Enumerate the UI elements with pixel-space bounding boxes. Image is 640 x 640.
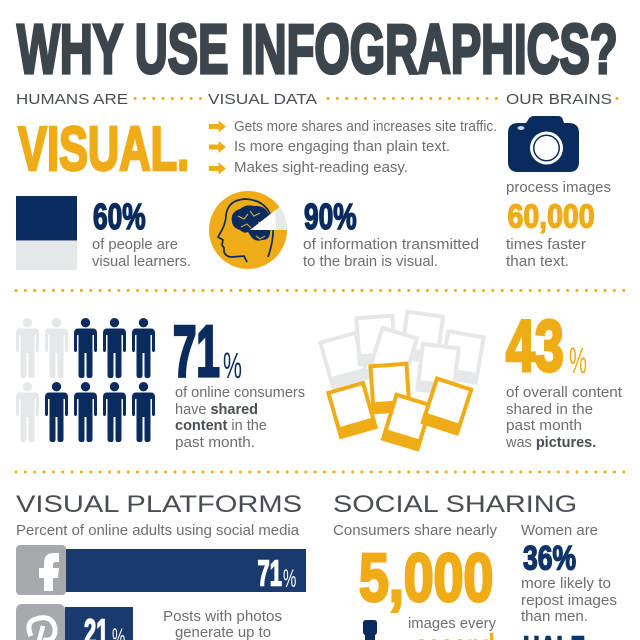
title: WHY USE INFOGRAPHICS? [17,10,618,88]
bar: facebook 71% [16,545,306,595]
text: online consumers: past month. [175,435,255,451]
stat: 43%: 43 [506,306,564,387]
text: images every: images every [408,616,497,632]
text: online consumers [175,385,305,451]
text: repost images [521,576,617,625]
text: times faster: times faster [506,237,586,253]
big word: visual: VISUAL. [18,116,189,184]
benefit 1: Gets more shares and increases site traffic. [234,119,497,135]
stat: 71% [173,313,242,392]
text: visual learners [92,237,191,270]
arrow 3 [209,162,226,174]
heading: visual platforms: VISUAL PLATFORMS [16,491,302,518]
heading: social sharing: SOCIAL SHARING [333,491,577,518]
text: overall content: past month [506,418,582,434]
text: visual learners: visual learners. [92,254,191,270]
bar: pinterest 21% [16,604,133,640]
stat: 60%: 60% [93,196,146,237]
text: information transmitted [303,237,479,270]
arrow 2 [209,141,226,153]
text: posts with photos [163,609,282,640]
bar: facebook 71%: 71 [258,554,282,594]
stat: 90%: 90% [304,196,357,237]
text: online consumers: have shared [175,402,258,418]
stat: 60,000: 60,000 [508,197,595,235]
text: times faster: than text. [506,254,569,270]
stat: 71%: % [223,346,242,387]
icon: camera shutter hand [363,620,377,640]
icon: brain in circle [209,191,287,269]
text: overall content: was pictures. [505,435,596,451]
text: overall content [505,385,622,451]
section heading: humans are: HUMANS ARE [16,92,128,108]
section heading: visual data: VISUAL DATA [208,92,317,108]
text: consumers share nearly: Consumers share nearly [333,523,498,539]
illustration: photo pile [318,309,486,452]
stat: 36%: 36% [523,539,576,577]
text: women are: Women are [521,523,598,539]
text: visual learners: of people are [92,237,178,253]
pictogram: people [16,318,155,442]
text: repost images: repost images [521,593,617,609]
icon: camera [508,116,579,172]
text: information transmitted: of information transmitted [303,237,479,253]
stat: 71%: 71 [173,313,220,392]
benefit 2: Is more engaging than plain text. [234,139,450,155]
benefit 3: Makes sight-reading easy. [234,160,408,176]
text: information transmitted: to the brain is visual. [303,254,438,270]
text: repost images: than men. [521,609,588,625]
text: repost images: more likely to [521,576,611,592]
text: process images: process images [506,180,611,196]
text: online consumers: of online consumers [175,385,305,401]
section heading: our brains: OUR BRAINS [506,92,612,108]
text: online consumers: content in the [175,418,267,434]
chart: 60 percent square [16,196,77,270]
benefits list [209,119,497,176]
text: overall content: of overall content [506,385,622,401]
text: times faster [506,237,586,270]
subheading: percent of adults: Percent of online adults using social media [16,523,300,539]
stat: 5,000: 5,000 [359,540,493,615]
text: overall content: shared in the [506,402,593,418]
bar: facebook 71%: % [283,565,296,593]
arrow 1 [209,120,226,132]
text: posts with photos: Posts with photos [163,609,282,625]
stat: 43%: % [569,342,587,382]
